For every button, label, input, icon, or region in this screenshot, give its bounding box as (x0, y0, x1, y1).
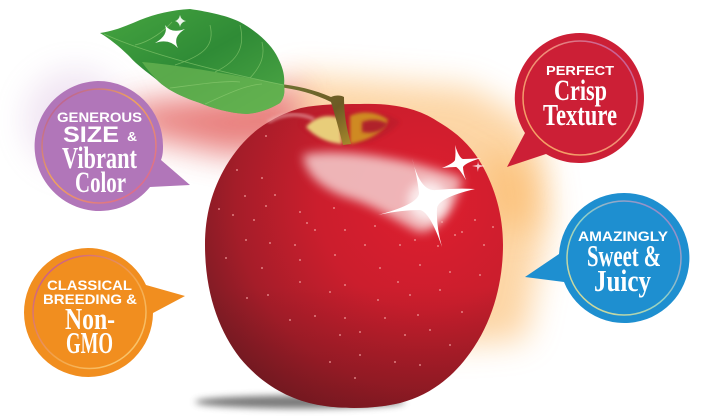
blue text: AMAZINGLY (578, 229, 668, 244)
blue bubble (525, 193, 689, 323)
blue text: Sweet & (587, 238, 661, 273)
purple text (57, 109, 142, 199)
leaf lower half (142, 62, 284, 114)
leaf blade (100, 9, 284, 114)
red text: Crisp (554, 74, 607, 107)
purple text: SIZE (63, 122, 119, 147)
sparkles on apple (378, 145, 485, 247)
orange ring (33, 256, 146, 368)
purple ring (42, 89, 156, 203)
callout: generous size and vibrant color (35, 81, 190, 211)
background glow: pink and orange (25, 70, 550, 345)
purple text: Vibrant (62, 140, 137, 175)
leaf veins (104, 22, 284, 104)
blue text (578, 229, 668, 298)
red ring (523, 41, 637, 155)
purple text: GENEROUS (57, 109, 142, 125)
callout: amazingly sweet and juicy (525, 193, 689, 323)
orange text: Non- (65, 301, 115, 336)
red text: PERFECT (546, 64, 614, 78)
apple dimple (268, 111, 400, 146)
orange text: CLASSICAL (47, 277, 132, 293)
leaf (100, 9, 284, 114)
orange text: BREEDING & (43, 291, 137, 307)
leaf sparkle (155, 15, 186, 48)
apple (205, 104, 503, 408)
callout: classical breeding and non-gmo (24, 248, 185, 377)
small sparkle (442, 145, 481, 180)
purple text: & (127, 129, 137, 144)
purple text: Color (75, 166, 126, 199)
purple bubble (35, 81, 190, 211)
orange text: GMO (66, 325, 113, 360)
apple speckles (218, 135, 494, 379)
red text: Texture (543, 97, 617, 132)
blue ring (567, 201, 681, 315)
stem (278, 84, 351, 145)
apple body (205, 104, 503, 408)
blue text: Juicy (594, 263, 651, 298)
red text (543, 64, 617, 132)
orange text (43, 277, 137, 360)
apple highlight (303, 152, 462, 232)
apple ground shadow (195, 396, 405, 408)
callout: perfect crisp texture (507, 33, 644, 167)
sparkle glow (408, 181, 448, 221)
orange bubble (24, 248, 185, 377)
large sparkle (378, 158, 475, 247)
tiny sparkle (472, 160, 485, 172)
red bubble (507, 33, 644, 167)
